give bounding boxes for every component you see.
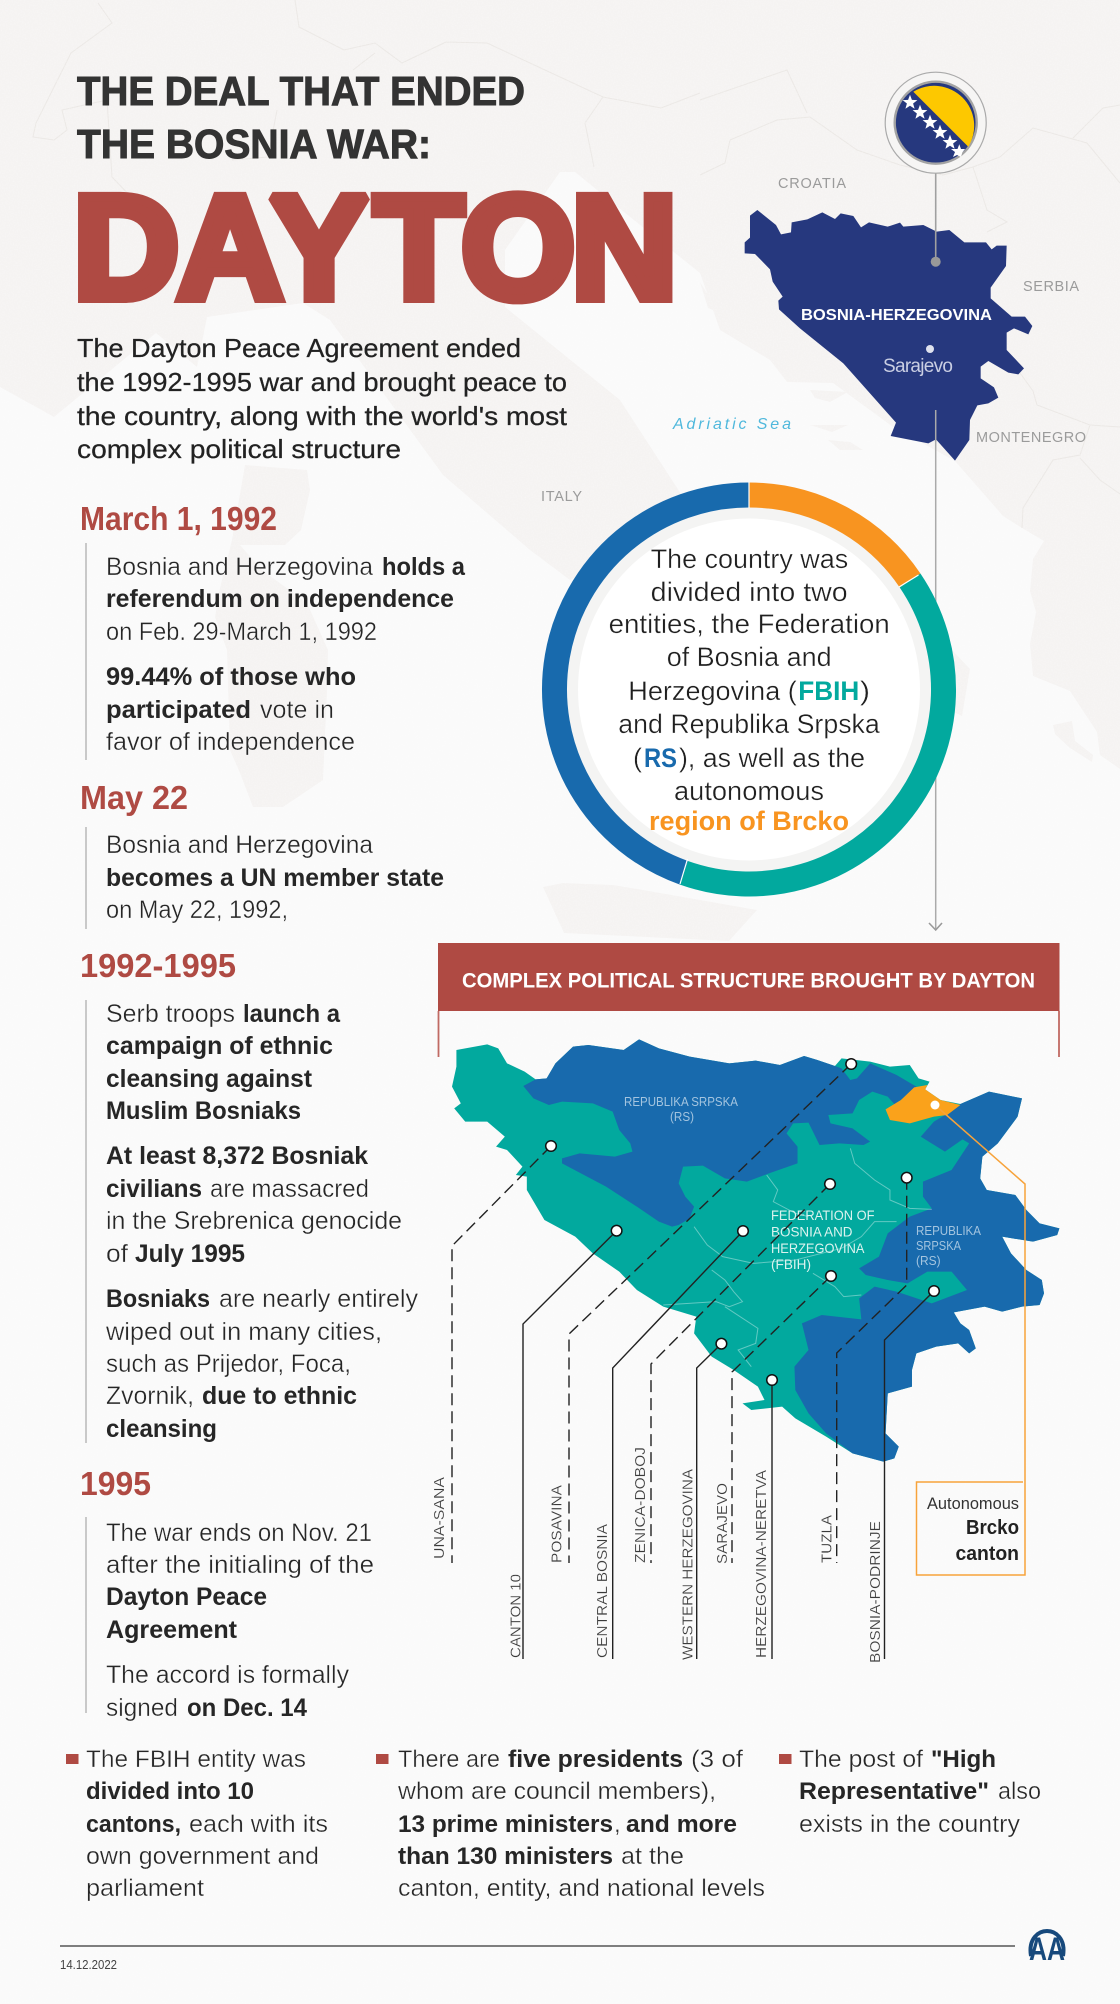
canton leader: Posavina: POSAVINA [548,1485,566,1563]
map: Bosnia-Herzegovina silhouette: BOSNIA-HERZEGOVINA [801,307,992,324]
neighbouring country labels: Adriatic Sea [672,416,791,433]
timeline: 1992-1995: are massacred [210,1175,369,1203]
timeline: 1995: signed [106,1694,178,1722]
timeline: May 22: on May 22, 1992, [106,896,288,924]
text block: FBIH cantons: cantons, [86,1811,181,1838]
title: THE BOSNIA WAR: [77,121,431,167]
map: cantons and entities: REPUBLIKA SRPSKA [624,1094,738,1109]
canton leader: Western Herzegovina [680,1338,727,1660]
callout: autonomous Brcko canton: Brcko [966,1517,1019,1539]
background map of the Balkans and Italy [0,0,1120,941]
intro paragraph: the 1992-1995 war and brought peace to [77,367,567,397]
map: cantons and entities: HERZEGOVINA [771,1240,865,1256]
panel: entities donut: ( [633,743,642,773]
text block: presidents and ministers [376,1746,765,1902]
map: cantons and entities: BOSNIA AND [771,1224,852,1240]
timeline: 1992-1995: launch a [243,1000,341,1028]
text block: presidents and ministers: whom are council members), [397,1778,716,1805]
callout: autonomous Brcko canton: Autonomous [927,1494,1019,1513]
canton leader: Tuzla [818,1172,912,1563]
timeline: 1995: 1995 [80,1466,151,1503]
panel heading: complex political structure banner [438,943,1060,1057]
panel: entities donut: ), as well as the [679,743,865,773]
canton leader: Zenica-Doboj [632,1179,835,1563]
map: cantons and entities: SRPSKA [916,1238,961,1253]
panel: entities donut: and Republika Srpska [618,709,881,739]
canton leader: Central Bosnia: CENTRAL BOSNIA [594,1524,611,1658]
panel: entities donut: of Bosnia and [667,642,832,672]
canton leader: Canton 10 [508,1225,622,1659]
map: cantons and entities: (RS) [916,1253,941,1268]
intro paragraph [77,333,568,464]
timeline: 1992-1995 [80,948,418,1443]
timeline: 1992-1995: cleansing against [106,1065,313,1093]
panel: entities donut: RS [644,743,677,773]
intro paragraph: the country, along with the world's most [77,401,568,431]
map: cantons and entities: (FBIH) [771,1256,811,1272]
panel: entities donut [554,482,944,884]
timeline: 1995: The war ends on Nov. 21 [106,1519,372,1547]
timeline: March 1, 1992: Bosnia and Herzegovina [106,553,373,581]
icon: Bosnian flag badge with pin line [885,72,986,267]
callout: autonomous Brcko canton [916,1100,1025,1575]
timeline: 1995: after the initialing of the [106,1551,374,1579]
title [77,68,525,167]
timeline: 1992-1995: At least 8,372 Bosniak [106,1142,368,1170]
text block: presidents and ministers: and more [626,1811,737,1838]
text block: presidents and ministers: (3 of [691,1746,743,1773]
callout: autonomous Brcko canton: canton [956,1543,1019,1565]
text block: presidents and ministers: There are [398,1746,500,1773]
canton leader: Herzegovina-Neretva: HERZEGOVINA-NERETVA [753,1470,770,1658]
panel: entities donut: autonomous [674,776,824,806]
text block: FBIH cantons [66,1746,328,1902]
timeline: March 1, 1992: March 1, 1992 [80,501,277,538]
canton leader: Sarajevo [714,1271,836,1564]
text block: High Representative: exists in the country [799,1811,1020,1838]
text block: presidents and ministers: canton, entity, and national levels [398,1875,765,1902]
timeline: 1992-1995: Zvornik, [106,1382,194,1410]
timeline: 1995: on Dec. 14 [187,1694,307,1722]
panel heading: complex political structure banner: COMPLEX POLITICAL STRUCTURE BROUGHT BY DAYTON [462,969,1035,992]
canton leader: Bosnia-Podrinje: BOSNIA-PODRINJE [867,1521,884,1663]
neighbouring country labels: SERBIA [1023,279,1079,295]
text block: presidents and ministers: five presidents [508,1746,683,1773]
panel: entities donut: The country was [651,544,848,574]
footer rule and date: 14.12.2022 [60,1957,117,1972]
canton leader: Central Bosnia [594,1226,748,1659]
timeline: March 1, 1992: referendum on independence [106,585,454,613]
canton leader: Una-Sana: UNA-SANA [431,1477,448,1559]
text block: High Representative: also [998,1778,1041,1805]
map: cantons and entities: REPUBLIKA [916,1223,981,1238]
headline: DAYTON: DAYTON [73,166,677,330]
timeline: May 22: becomes a UN member state [106,864,444,892]
map: Bosnia-Herzegovina silhouette: Sarajevo [883,356,953,377]
neighbouring country labels: ITALY [541,489,582,505]
text block: High Representative [779,1746,1041,1838]
text block: FBIH cantons: parliament [86,1875,204,1902]
canton leader: Western Herzegovina: WESTERN HERZEGOVINA [680,1469,696,1660]
text block: presidents and ministers: at the [621,1843,684,1870]
text block: presidents and ministers: than 130 ministers [398,1843,613,1870]
canton leader: Zenica-Doboj: ZENICA-DOBOJ [632,1447,649,1563]
panel: entities donut: Herzegovina ( [628,676,797,706]
panel: entities donut: divided into two [651,577,848,607]
timeline: March 1, 1992 [80,501,466,760]
canton leader: Sarajevo: SARAJEVO [714,1483,731,1564]
map: cantons and entities: (RS) [670,1109,694,1124]
canton leader: Tuzla: TUZLA [818,1515,835,1563]
panel: entities donut: entities, the Federation [609,609,890,639]
timeline: March 1, 1992: on Feb. 29-March 1, 1992 [106,618,377,646]
intro paragraph: The Dayton Peace Agreement ended [77,333,521,363]
text block: presidents and ministers: 13 prime ministers [398,1811,613,1838]
timeline: March 1, 1992: vote in [260,696,334,724]
timeline: March 1, 1992: holds a [382,553,466,581]
canton leader: Herzegovina-Neretva [753,1375,777,1659]
map: cantons and entities [452,1039,1059,1462]
canton leader: Posavina [548,1059,856,1563]
timeline: 1992-1995: Bosniaks [106,1285,210,1313]
timeline: 1992-1995: Serb troops [106,1000,235,1028]
neighbouring country labels: MONTENEGRO [976,430,1086,446]
canton leader: Una-Sana [431,1141,556,1563]
timeline: 1995 [80,1466,374,1722]
timeline: March 1, 1992: favor of independence [106,728,355,756]
timeline: March 1, 1992: participated [106,696,251,724]
text block: presidents and ministers: , [614,1811,621,1838]
timeline: 1992-1995: cleansing [106,1415,217,1443]
timeline: 1992-1995: wiped out in many cities, [105,1318,382,1346]
text block: FBIH cantons: divided into 10 [86,1778,254,1805]
map: cantons and entities: FEDERATION OF [771,1207,874,1223]
text block: FBIH cantons: own government and [86,1843,319,1870]
timeline: 1995: The accord is formally [106,1661,349,1689]
neighbouring country labels: CROATIA [778,176,846,192]
panel: entities donut: ) [860,676,870,706]
text block: High Representative: Representative" [799,1778,989,1805]
timeline: 1992-1995: July 1995 [135,1240,245,1268]
timeline: May 22: May 22 [80,780,188,817]
timeline: 1992-1995: due to ethnic [202,1382,357,1410]
timeline: 1992-1995: are nearly entirely [219,1285,418,1313]
neighbouring country labels [541,176,1086,505]
timeline: 1995: Dayton Peace [106,1583,267,1611]
text block: High Representative: "High [931,1746,996,1773]
canton leader: Canton 10: CANTON 10 [508,1574,524,1658]
text block: High Representative: The post of [799,1746,923,1773]
timeline: 1992-1995: 1992-1995 [80,948,236,985]
text block: FBIH cantons: The FBIH entity was [86,1746,306,1773]
canton leader: Bosnia-Podrinje [867,1286,939,1663]
timeline: May 22: Bosnia and Herzegovina [106,831,373,859]
timeline: 1992-1995: such as Prijedor, Foca, [106,1350,351,1378]
map: Bosnia-Herzegovina silhouette [745,210,1032,461]
timeline: 1992-1995: in the Srebrenica genocide [106,1207,402,1235]
text block: FBIH cantons: each with its [189,1811,328,1838]
connector line with arrow to the structure panel [929,410,942,930]
timeline: 1992-1995: campaign of ethnic [106,1032,333,1060]
timeline: 1992-1995: civilians [106,1175,202,1203]
timeline: 1995: Agreement [106,1616,238,1644]
timeline: March 1, 1992: 99.44% of those who [106,663,356,691]
timeline: May 22 [80,780,444,929]
timeline: 1992-1995: Muslim Bosniaks [106,1097,301,1125]
panel: entities donut: region of Brcko [649,806,849,836]
intro paragraph: complex political structure [77,434,401,464]
icon: AA agency logo: AA [1029,1931,1065,1967]
title: THE DEAL THAT ENDED [77,68,525,114]
timeline: 1992-1995: of [106,1240,128,1268]
panel: entities donut: FBIH [798,676,859,706]
